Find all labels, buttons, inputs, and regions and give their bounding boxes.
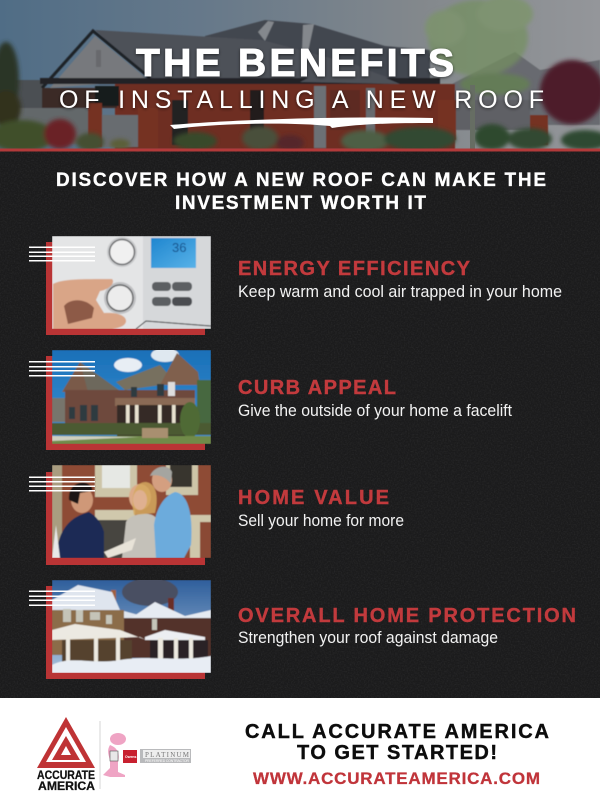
white stripes bbox=[29, 361, 95, 376]
heading: ENERGY EFFICIENCY bbox=[238, 258, 471, 280]
white stripes bbox=[29, 590, 95, 606]
row 3: home value bbox=[29, 465, 404, 565]
owens corning badge bbox=[123, 750, 137, 763]
photo: snowy house bbox=[52, 578, 211, 673]
call to action: CALL ACCURATE AMERICA bbox=[245, 721, 549, 743]
subheading: DISCOVER HOW A NEW ROOF CAN MAKE THE bbox=[56, 170, 546, 191]
logo: accurate america: AMERICA bbox=[38, 781, 95, 793]
owens corning badge: Owens bbox=[125, 755, 137, 759]
divider bbox=[100, 721, 101, 789]
description: Strengthen your roof against damage bbox=[238, 629, 498, 647]
red offset panel bbox=[46, 472, 205, 565]
red offset panel bbox=[46, 242, 205, 335]
header photo: house with new roof bbox=[0, 0, 600, 152]
call to action: WWW.ACCURATEAMERICA.COM bbox=[253, 769, 540, 788]
description: Give the outside of your home a facelift bbox=[238, 402, 512, 420]
call to action: TO GET STARTED! bbox=[297, 742, 497, 764]
photo: thermostat bbox=[52, 236, 211, 329]
call to action bbox=[245, 721, 549, 788]
red offset panel bbox=[46, 356, 205, 450]
pink panther mascot bbox=[103, 733, 126, 777]
white stripes bbox=[29, 476, 95, 492]
row 1: energy efficiency bbox=[29, 236, 562, 335]
red offset panel bbox=[46, 586, 205, 679]
platinum contractor badge bbox=[140, 749, 191, 763]
logo: accurate america bbox=[37, 717, 95, 793]
photo: brick house bbox=[52, 348, 211, 444]
brush underline bbox=[170, 117, 433, 129]
title bbox=[59, 42, 544, 114]
row 4: overall home protection bbox=[29, 578, 576, 679]
photo: couple with agent bbox=[52, 465, 211, 558]
title: OF INSTALLING A NEW ROOF bbox=[59, 86, 544, 114]
header trees and shrubs bbox=[0, 0, 600, 152]
subheading bbox=[56, 170, 546, 214]
description: Keep warm and cool air trapped in your home bbox=[238, 283, 562, 301]
subheading: INVESTMENT WORTH IT bbox=[175, 193, 426, 214]
description: Sell your home for more bbox=[238, 512, 404, 530]
photo: thermostat: 36 bbox=[172, 240, 186, 255]
heading: CURB APPEAL bbox=[238, 377, 396, 399]
row 2: curb appeal bbox=[29, 348, 512, 450]
title: THE BENEFITS bbox=[136, 42, 454, 85]
dark shingle background bbox=[0, 150, 600, 699]
platinum contractor badge: PLATINUM bbox=[145, 751, 190, 759]
platinum contractor badge: PREFERRED CONTRACTOR bbox=[145, 759, 189, 763]
heading: OVERALL HOME PROTECTION bbox=[238, 605, 576, 627]
logo: accurate america: ACCURATE bbox=[37, 770, 95, 782]
footer panel bbox=[0, 698, 600, 808]
red rule bbox=[0, 148, 600, 152]
heading: HOME VALUE bbox=[238, 487, 389, 509]
white stripes bbox=[29, 246, 95, 262]
